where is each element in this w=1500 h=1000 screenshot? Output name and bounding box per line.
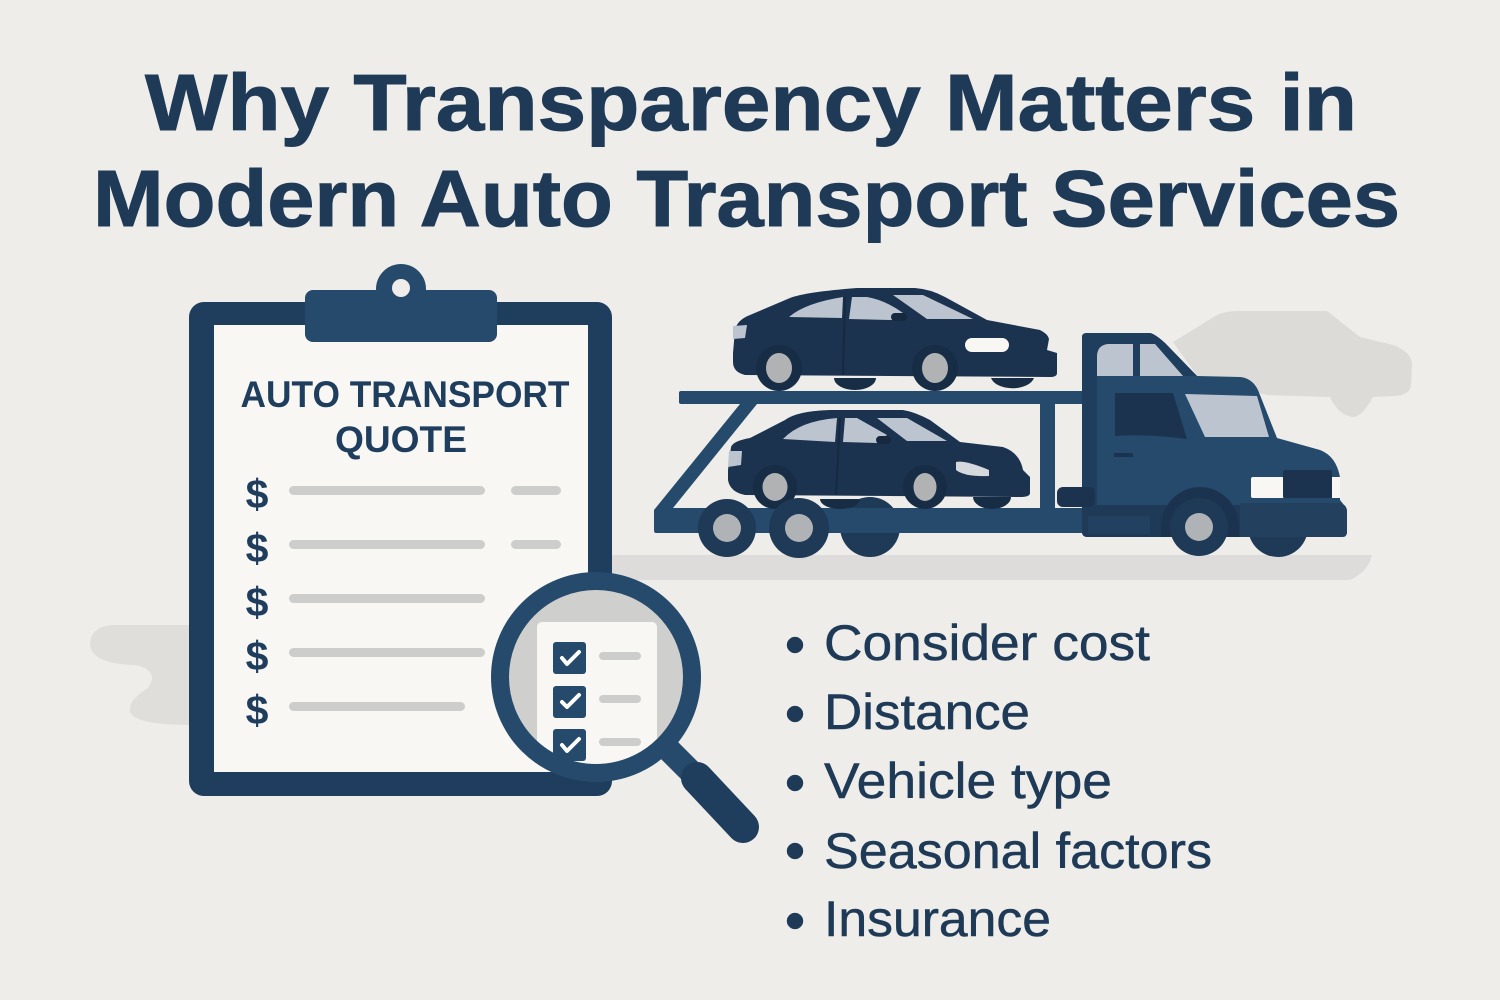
car carrier truck: [654, 288, 1347, 558]
quote heading: QUOTE: [335, 419, 467, 460]
rear trailer wheel behind deck: [840, 497, 900, 557]
magnifier lens contents: [509, 590, 683, 764]
bullet: consider cost: Consider cost: [824, 615, 1150, 671]
magnifier handle: [660, 741, 700, 781]
dollar signs: $: [246, 525, 269, 571]
magnifier grip: [697, 778, 743, 827]
truck front wheel behind bumper: [1250, 537, 1306, 557]
rear fender step: [1057, 487, 1095, 507]
dollar signs: $: [246, 471, 269, 517]
ground shadow: [610, 555, 1372, 580]
title: Modern Auto Transport Services: [93, 154, 1400, 243]
truck cab: [1082, 333, 1347, 537]
magnifying glass: [500, 580, 743, 827]
checklist: [553, 642, 641, 761]
factors list: [787, 615, 1212, 947]
truck main wheel: [1161, 487, 1239, 556]
trailer wheels: [698, 498, 829, 558]
bullet: vehicle type: Vehicle type: [824, 753, 1112, 809]
truck lower body band: [1082, 505, 1240, 537]
dollar signs: $: [246, 687, 269, 733]
clipboard: [189, 264, 612, 796]
headlight: [1251, 477, 1284, 498]
bumper: [1240, 503, 1347, 537]
windshield: [1185, 394, 1269, 437]
quote heading: AUTO TRANSPORT: [240, 374, 570, 415]
door seam: [843, 297, 845, 375]
dollar signs: [246, 471, 269, 733]
background smudge: left: [90, 625, 192, 725]
dollar signs: $: [246, 633, 269, 679]
trailer frame: [654, 391, 1090, 533]
cab rear pillar and roof shading: [1082, 333, 1197, 505]
side marker light: [1332, 477, 1340, 498]
quote line items: [289, 486, 561, 711]
bullet: insurance: Insurance: [824, 891, 1051, 947]
upper car: [733, 288, 1057, 391]
magnifier ring: [500, 581, 692, 773]
title: Why Transparency Matters in: [145, 58, 1357, 147]
door handle: [1114, 453, 1133, 457]
door seam: [836, 418, 840, 495]
dollar signs: $: [246, 579, 269, 625]
cab door window: [1115, 393, 1187, 439]
clipboard paper: [214, 325, 588, 772]
clipboard board: [189, 302, 612, 796]
quote heading: [240, 374, 570, 460]
clipboard clip: [305, 264, 497, 342]
cab upper windows: [1097, 344, 1183, 376]
infographic canvas: [90, 72, 1412, 937]
bullet: distance: Distance: [824, 684, 1030, 740]
title: [93, 58, 1400, 243]
background ghost car: [1173, 311, 1412, 417]
lower car: [728, 410, 1030, 509]
grille: [1283, 470, 1332, 498]
bullet: seasonal factors: Seasonal factors: [824, 823, 1212, 879]
